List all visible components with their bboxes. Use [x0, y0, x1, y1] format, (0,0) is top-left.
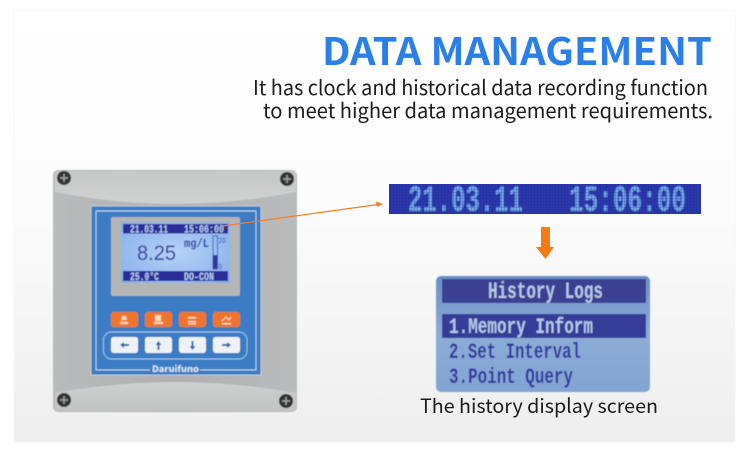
- history logs screen: 3.Point Query: [449, 365, 573, 390]
- device housing: [53, 170, 297, 412]
- arrow: down: [536, 227, 554, 259]
- history logs screen: History Logs: [488, 279, 603, 305]
- LCD screen: [121, 222, 230, 284]
- description text: It has clock and historical data recording function: [253, 71, 708, 101]
- icon: corner screws: [57, 171, 294, 408]
- history logs screen: [436, 276, 650, 392]
- LCD screen: 8.25: [137, 242, 176, 265]
- display bezel: [111, 217, 240, 296]
- enlarged date and time strip: 15:06:00: [569, 181, 686, 223]
- arrow: from device clock to enlarged clock: [223, 202, 383, 226]
- LCD screen: 21.03.11: [130, 224, 168, 236]
- history logs screen: 1.Memory Inform: [449, 315, 593, 340]
- device: water quality controller: [53, 170, 297, 412]
- description text: to meet higher data management requirements.: [263, 94, 713, 124]
- title: DATA MANAGEMENT: [322, 21, 712, 76]
- LCD screen: 25.0°C: [130, 272, 159, 284]
- LCD screen: mg/L: [184, 237, 209, 251]
- description text: [253, 71, 713, 124]
- orange function buttons: [111, 312, 240, 327]
- LCD screen: 20: [218, 235, 226, 245]
- LCD screen: 0: [218, 261, 222, 271]
- LCD screen: DO-CON: [184, 272, 214, 284]
- navigation button frame: [104, 332, 247, 359]
- LCD screen: 15:06:00: [184, 224, 224, 236]
- caption: The history display screen: [420, 390, 658, 419]
- front blue panel: [91, 206, 261, 375]
- enlarged date and time strip: 21.03.11: [408, 181, 523, 223]
- brand label: Daruifuno: [152, 362, 200, 375]
- enlarged date and time strip: [389, 181, 701, 223]
- arrow keys: [111, 337, 240, 353]
- history logs screen: 2.Set Interval: [449, 340, 581, 365]
